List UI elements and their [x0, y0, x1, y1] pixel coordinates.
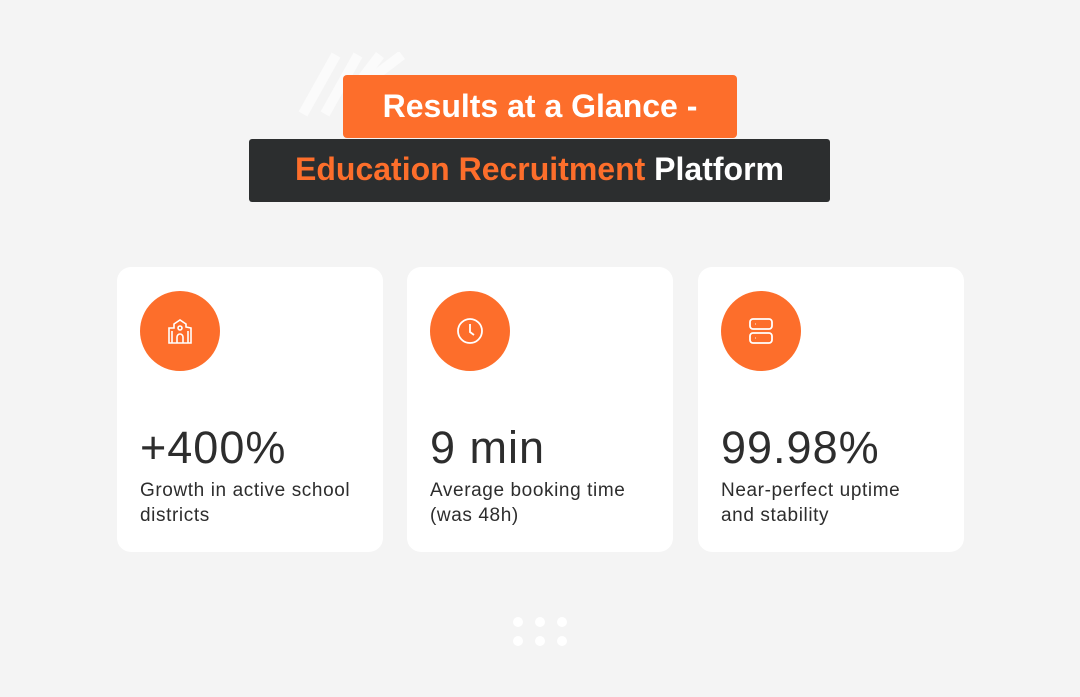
decorative stripes	[298, 52, 428, 117]
icon: clock	[430, 291, 510, 371]
decorative dots	[513, 617, 567, 646]
card: booking: 9 min	[430, 422, 545, 473]
card: districts: districts	[140, 505, 210, 526]
icon: server	[721, 291, 801, 371]
card: booking	[407, 267, 673, 552]
card: districts: Growth in active school	[140, 480, 350, 501]
title: orange	[343, 75, 737, 138]
card: booking: (was 48h)	[430, 505, 519, 526]
card: uptime: 99.98%	[721, 422, 880, 473]
card: uptime: and stability	[721, 505, 829, 526]
card: uptime	[698, 267, 964, 552]
card: districts: +400%	[140, 422, 286, 473]
title: dark: Education Recruitment Platform	[295, 151, 784, 187]
title: dark	[249, 139, 830, 202]
card: booking: Average booking time	[430, 480, 625, 501]
card: uptime: Near-perfect uptime	[721, 480, 900, 501]
card: districts	[117, 267, 383, 552]
title: orange: Results at a Glance -	[383, 88, 697, 124]
icon: school	[140, 291, 220, 371]
